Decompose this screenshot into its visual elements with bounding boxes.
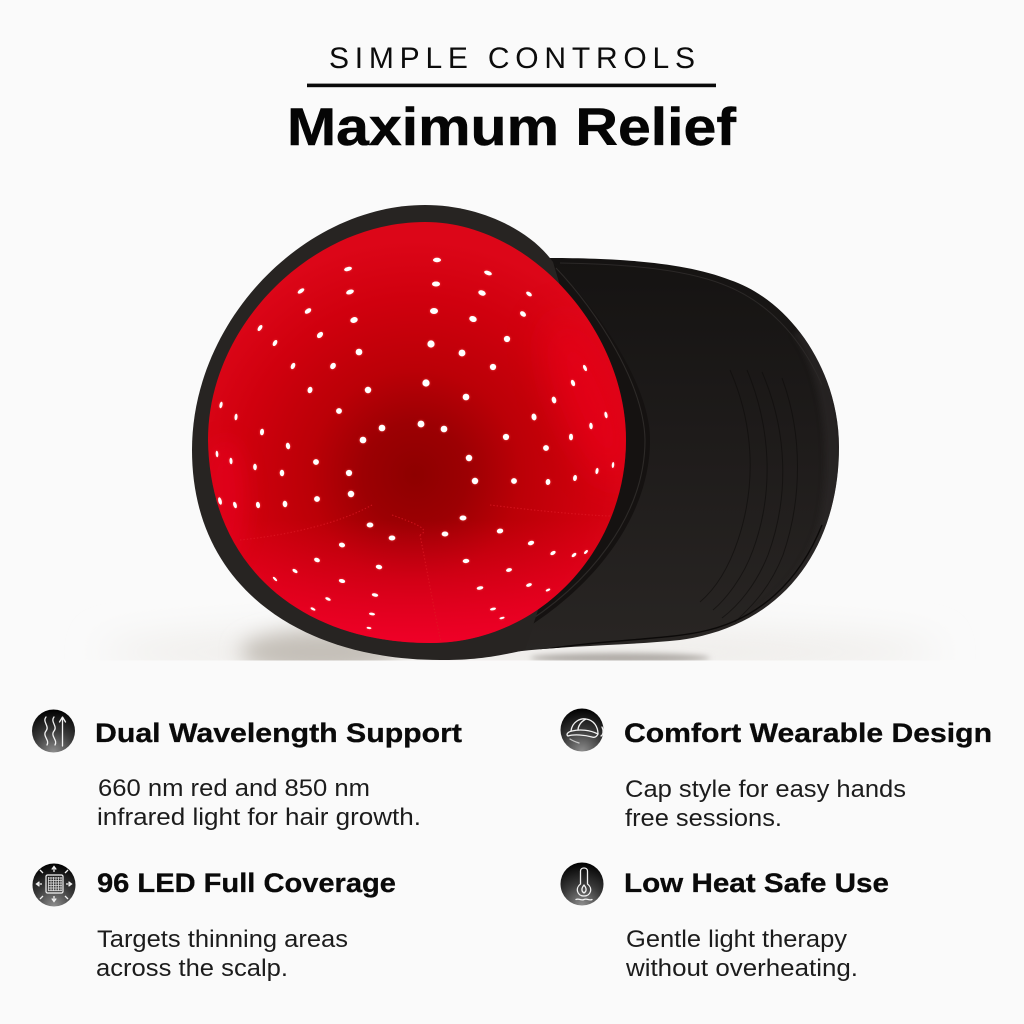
description (625, 926, 858, 982)
brim stitching (700, 370, 798, 622)
ground shadow (156, 618, 884, 660)
LED lights (215, 258, 614, 629)
description: Cap style for easy hands (625, 776, 906, 803)
heading: 96 LED Full Coverage (97, 868, 396, 898)
description: infrared light for hair growth. (97, 804, 421, 831)
description: 660 nm red and 850 nm (98, 775, 370, 802)
cap brim (516, 258, 839, 652)
feature: low heat safe use (560, 862, 889, 982)
description: free sessions. (625, 805, 782, 832)
heading: Low Heat Safe Use (624, 868, 889, 898)
description: without overheating. (625, 955, 858, 982)
heading: Dual Wavelength Support (95, 718, 462, 748)
description (625, 776, 906, 832)
heading: Comfort Wearable Design (624, 718, 992, 748)
brim edge highlight band (540, 263, 833, 650)
eyebrow text: SIMPLE CONTROLS (329, 42, 695, 75)
feature: comfort wearable design (560, 708, 992, 832)
feature: dual wavelength support (32, 710, 462, 831)
crown rim (192, 205, 600, 660)
icon: cap (560, 708, 604, 752)
hat photo illustration (156, 205, 884, 660)
feature: 96 LED full coverage (32, 864, 396, 982)
description (97, 775, 421, 831)
header: simple controls (287, 42, 736, 157)
description: Gentle light therapy (626, 926, 847, 953)
icon: thermometer (560, 862, 604, 906)
header rule (307, 84, 716, 87)
interior lighting (208, 328, 626, 643)
icon: heat waves and arrow (32, 710, 75, 752)
description: across the scalp. (96, 955, 288, 982)
description: Targets thinning areas (97, 926, 348, 953)
description (96, 926, 348, 982)
inner sweatband (480, 258, 650, 650)
main title: Maximum Relief (287, 98, 736, 157)
icon: LED grid with arrows (32, 864, 76, 906)
red LED cap interior (200, 222, 652, 650)
